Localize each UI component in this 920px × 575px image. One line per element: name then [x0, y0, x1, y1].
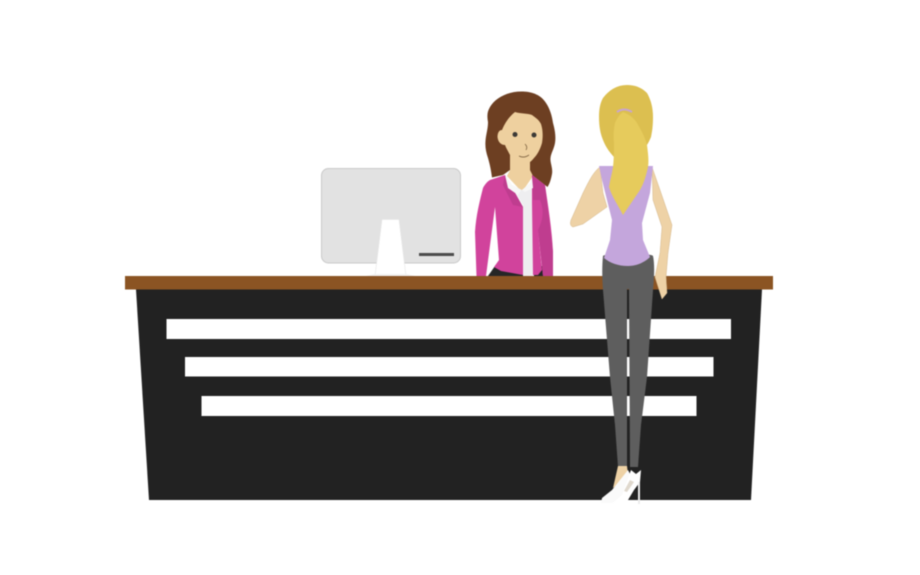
desk stripe 2 [185, 357, 714, 376]
receptionist black top [488, 266, 546, 276]
customer far arm [570, 167, 607, 227]
customer shoes [601, 470, 641, 504]
receptionist jacket shading [503, 175, 553, 276]
receptionist [475, 91, 555, 276]
desk front panel [136, 290, 762, 500]
customer woman [570, 85, 672, 504]
receptionist neck [507, 155, 533, 192]
customer hair tie [617, 110, 632, 112]
customer trousers [602, 254, 654, 467]
desk counter top [125, 276, 773, 290]
customer feet [613, 466, 628, 488]
customer near arm [652, 167, 672, 299]
receptionist face [498, 112, 543, 166]
desk stripe 1 [166, 319, 731, 339]
receptionist collar [505, 175, 533, 195]
receptionist jacket [475, 175, 553, 276]
receptionist white shirt [505, 175, 534, 276]
customer ponytail [609, 112, 648, 215]
desk stripe 3 [202, 396, 696, 416]
customer sleeveless top [599, 166, 653, 266]
receptionist hair [485, 91, 555, 187]
computer monitor [322, 168, 460, 276]
customer bun hair [599, 85, 653, 158]
